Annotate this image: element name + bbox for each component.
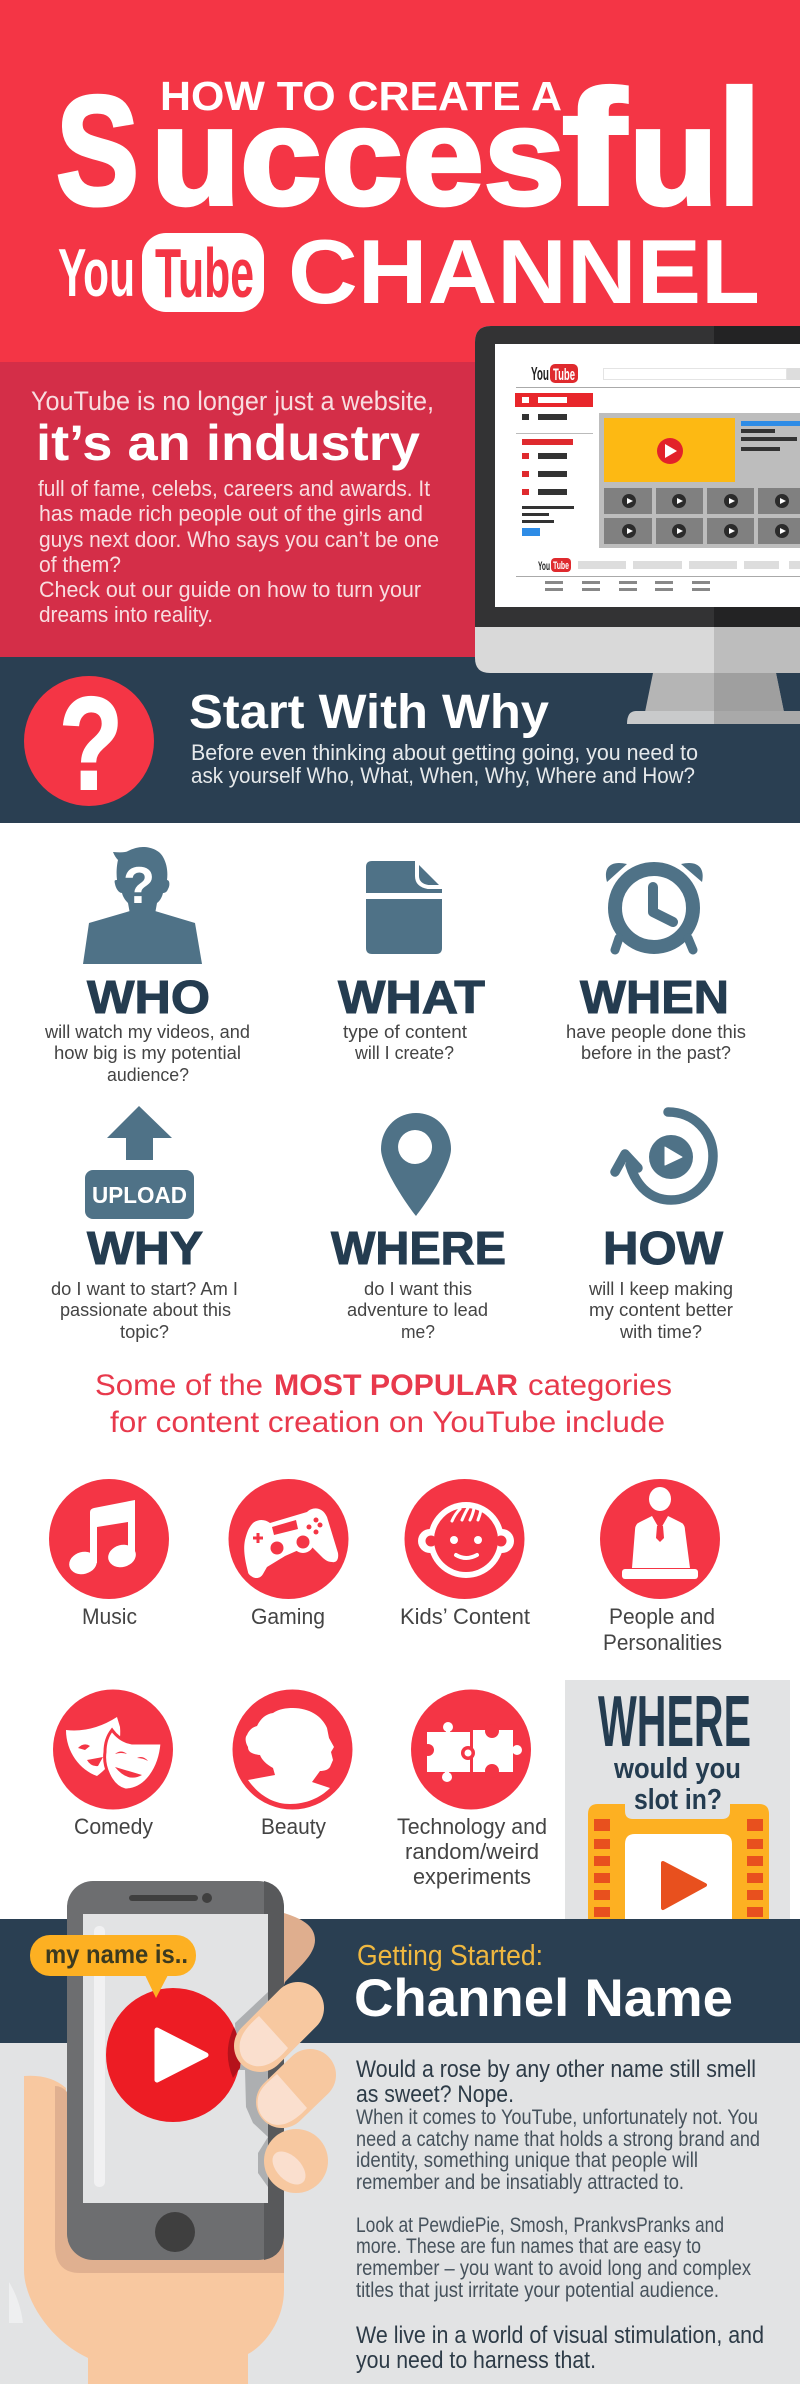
icon: upload <box>85 1106 194 1219</box>
panel: where would you slot in <box>565 1680 790 1920</box>
category: technology and random weird experiments <box>397 1690 547 1889</box>
text: channel name paragraph two: remember – you want to avoid long and complex <box>356 2257 751 2280</box>
category: gaming <box>228 1479 348 1629</box>
text: when question: have people done this <box>566 1022 746 1042</box>
label: technology: experiments <box>413 1864 531 1889</box>
text: rose intro: Would a rose by any other name still smell <box>356 2056 756 2083</box>
text: visual stimulation closer <box>356 2322 764 2374</box>
text: start with why body: ask yourself Who, What, When, Why, Where and How? <box>191 763 695 788</box>
text: channel name paragraph two <box>356 2214 751 2302</box>
heading: channel name: Channel Name <box>354 1969 733 2028</box>
screen: search bar <box>604 368 800 380</box>
text: channel name paragraph two: more. These are fun names that are easy to <box>356 2235 701 2258</box>
text: what question: type of content <box>343 1022 467 1042</box>
label: people and personalities: People and <box>609 1604 715 1629</box>
icon: film strip <box>588 1804 769 1920</box>
heading: most popular categories: for content creation on YouTube include <box>110 1406 665 1439</box>
icon: woman profile <box>246 1708 334 1804</box>
text: why question <box>51 1279 238 1342</box>
icon: replay play <box>615 1112 713 1200</box>
panel: intro <box>0 362 500 658</box>
category: beauty <box>232 1690 352 1839</box>
phone body <box>67 1881 284 2260</box>
panel: who <box>44 847 250 1085</box>
intro body text: has made rich people out of the girls and <box>39 501 423 526</box>
heading: where: WHERE <box>331 1222 506 1274</box>
heading: how: HOW <box>603 1222 724 1274</box>
label: kids content: Kids’ Content <box>400 1604 530 1629</box>
title: Tube <box>155 234 254 312</box>
title: u <box>629 80 718 234</box>
heading: when: WHEN <box>580 971 729 1023</box>
category: comedy <box>53 1690 173 1839</box>
text: channel name paragraph one <box>356 2106 760 2194</box>
label: comedy: Comedy <box>74 1814 153 1839</box>
icon: desktop monitor with YouTube page <box>475 326 800 724</box>
label: music: Music <box>82 1604 137 1629</box>
panel: start with why band <box>0 657 800 823</box>
intro body text: dreams into reality. <box>39 602 213 627</box>
icon: question mark: ? <box>59 670 123 817</box>
callout: my name is <box>30 1935 196 1998</box>
label: beauty: Beauty <box>261 1814 326 1839</box>
text: where question <box>347 1279 488 1342</box>
text: where question: do I want this <box>364 1279 472 1299</box>
label: people and personalities <box>603 1604 722 1655</box>
label: gaming: Gaming <box>251 1604 325 1629</box>
title: You <box>58 235 135 311</box>
icon: hand holding phone <box>9 1881 328 2384</box>
text: where question: me? <box>401 1322 435 1342</box>
text: where question: adventure to lead <box>347 1300 488 1320</box>
icon: person with question mark: ? <box>123 857 155 915</box>
panel: red title header <box>0 0 800 362</box>
category: people and personalities <box>600 1479 722 1655</box>
intro body text: guys next door. Who says you can’t be one <box>39 527 439 552</box>
intro body text: full of fame, celebs, careers and awards. It <box>38 476 430 501</box>
screen: YouTube logo: You <box>531 364 549 384</box>
text: how question: my content better <box>589 1300 733 1320</box>
title: CHANNEL <box>288 222 760 323</box>
text: why question: topic? <box>120 1322 169 1342</box>
screen: footer <box>516 558 800 591</box>
heading: getting started: Getting Started: <box>357 1940 543 1972</box>
intro lead-in: YouTube is no longer just a website, <box>31 386 434 416</box>
intro body text <box>38 476 439 627</box>
text: start with why body <box>191 740 698 788</box>
icon: music note <box>67 1500 138 1577</box>
text: why question: passionate about this <box>60 1300 231 1320</box>
text: visual stimulation closer: you need to harness that. <box>356 2347 596 2374</box>
icon: puzzle pieces <box>422 1722 522 1782</box>
title: l <box>717 56 762 239</box>
screen: footer: Tube <box>553 560 569 572</box>
text: what question <box>343 1022 467 1063</box>
text: how question: will I keep making <box>588 1279 733 1299</box>
text: start with why body: Before even thinking about getting going, you need to <box>191 740 698 765</box>
text: who question: how big is my potential <box>54 1043 241 1063</box>
label: technology <box>397 1814 547 1889</box>
heading: why: WHY <box>87 1222 203 1274</box>
screen: YouTube logo <box>531 364 578 384</box>
text: would you slot in <box>613 1753 741 1816</box>
heading: most popular categories <box>95 1369 672 1439</box>
title: HOW TO CREATE A <box>160 73 562 119</box>
text: who question: will watch my videos, and <box>44 1022 250 1042</box>
panel: channel name grey background <box>0 2043 800 2384</box>
fingers <box>240 2008 328 2193</box>
label: people and personalities: Personalities <box>603 1630 722 1655</box>
label: technology: random/weird <box>405 1839 539 1864</box>
text: visual stimulation closer: We live in a world of visual stimulation, and <box>356 2322 764 2349</box>
heading: most popular categories: categories <box>528 1369 672 1402</box>
category: kids content <box>400 1479 530 1629</box>
title: ucces <box>151 80 565 234</box>
callout: my name is: my name is.. <box>45 1939 188 1969</box>
icon: game controller <box>244 1508 338 1578</box>
category: music <box>49 1479 169 1629</box>
text: would you slot in: slot in? <box>634 1784 722 1816</box>
text: rose intro: as sweet? Nope. <box>356 2081 514 2108</box>
panel: how <box>588 1112 733 1342</box>
icon: theatre masks <box>66 1717 162 1790</box>
panel: when <box>566 863 746 1063</box>
icon: child face <box>418 1502 514 1578</box>
screen: footer: You <box>538 559 550 573</box>
panel: channel name band <box>0 1919 800 2043</box>
title <box>56 56 762 323</box>
intro body text: Check out our guide on how to turn your <box>39 577 421 602</box>
text: why question: do I want to start? Am I <box>51 1279 238 1299</box>
text: who question: audience? <box>107 1065 189 1085</box>
text: who question <box>44 1022 250 1085</box>
icon: person at podium <box>622 1487 698 1579</box>
intro body text: of them? <box>39 552 121 577</box>
icon: question mark <box>24 670 154 817</box>
icon: map pin <box>381 1113 451 1216</box>
text: would you slot in: would you <box>613 1753 741 1785</box>
icon: alarm clock <box>606 863 703 950</box>
text: channel name paragraph two: titles that just irritate your potential audience. <box>356 2279 719 2302</box>
text: channel name paragraph one: remember and be insatiably attracted to. <box>356 2171 684 2194</box>
label: technology: Technology and <box>397 1814 547 1839</box>
screen: YouTube logo: Tube <box>553 365 575 384</box>
text: how question: with time? <box>619 1322 702 1342</box>
heading: most popular categories: Some of the <box>95 1369 263 1402</box>
text: how question <box>588 1279 733 1342</box>
heading: most popular categories: MOST POPULAR <box>274 1369 518 1402</box>
intro headline: it’s an industry <box>36 415 420 471</box>
title: f <box>562 56 627 239</box>
text: when question <box>566 1022 746 1063</box>
screen: video area <box>599 413 800 548</box>
panel: where <box>331 1113 506 1342</box>
icon: red play button <box>106 1988 241 2122</box>
icon: document <box>366 861 442 954</box>
icon: person with question mark <box>83 847 202 964</box>
title: S <box>56 64 139 237</box>
text: channel name paragraph one: identity, something unique that people will <box>356 2149 698 2172</box>
icon: upload: UPLOAD <box>92 1182 187 1208</box>
heading: what: WHAT <box>338 971 485 1023</box>
text: rose intro <box>356 2056 756 2108</box>
text: channel name paragraph two: Look at PewdiePie, Smosh, PrankvsPranks and <box>356 2214 724 2237</box>
screen: sidebar <box>515 393 593 536</box>
panel: why <box>51 1106 238 1342</box>
panel: what <box>338 861 485 1063</box>
heading: who: WHO <box>87 971 210 1023</box>
text: what question: will I create? <box>354 1043 454 1063</box>
heading: start with why: Start With Why <box>189 686 549 739</box>
text: when question: before in the past? <box>581 1043 731 1063</box>
